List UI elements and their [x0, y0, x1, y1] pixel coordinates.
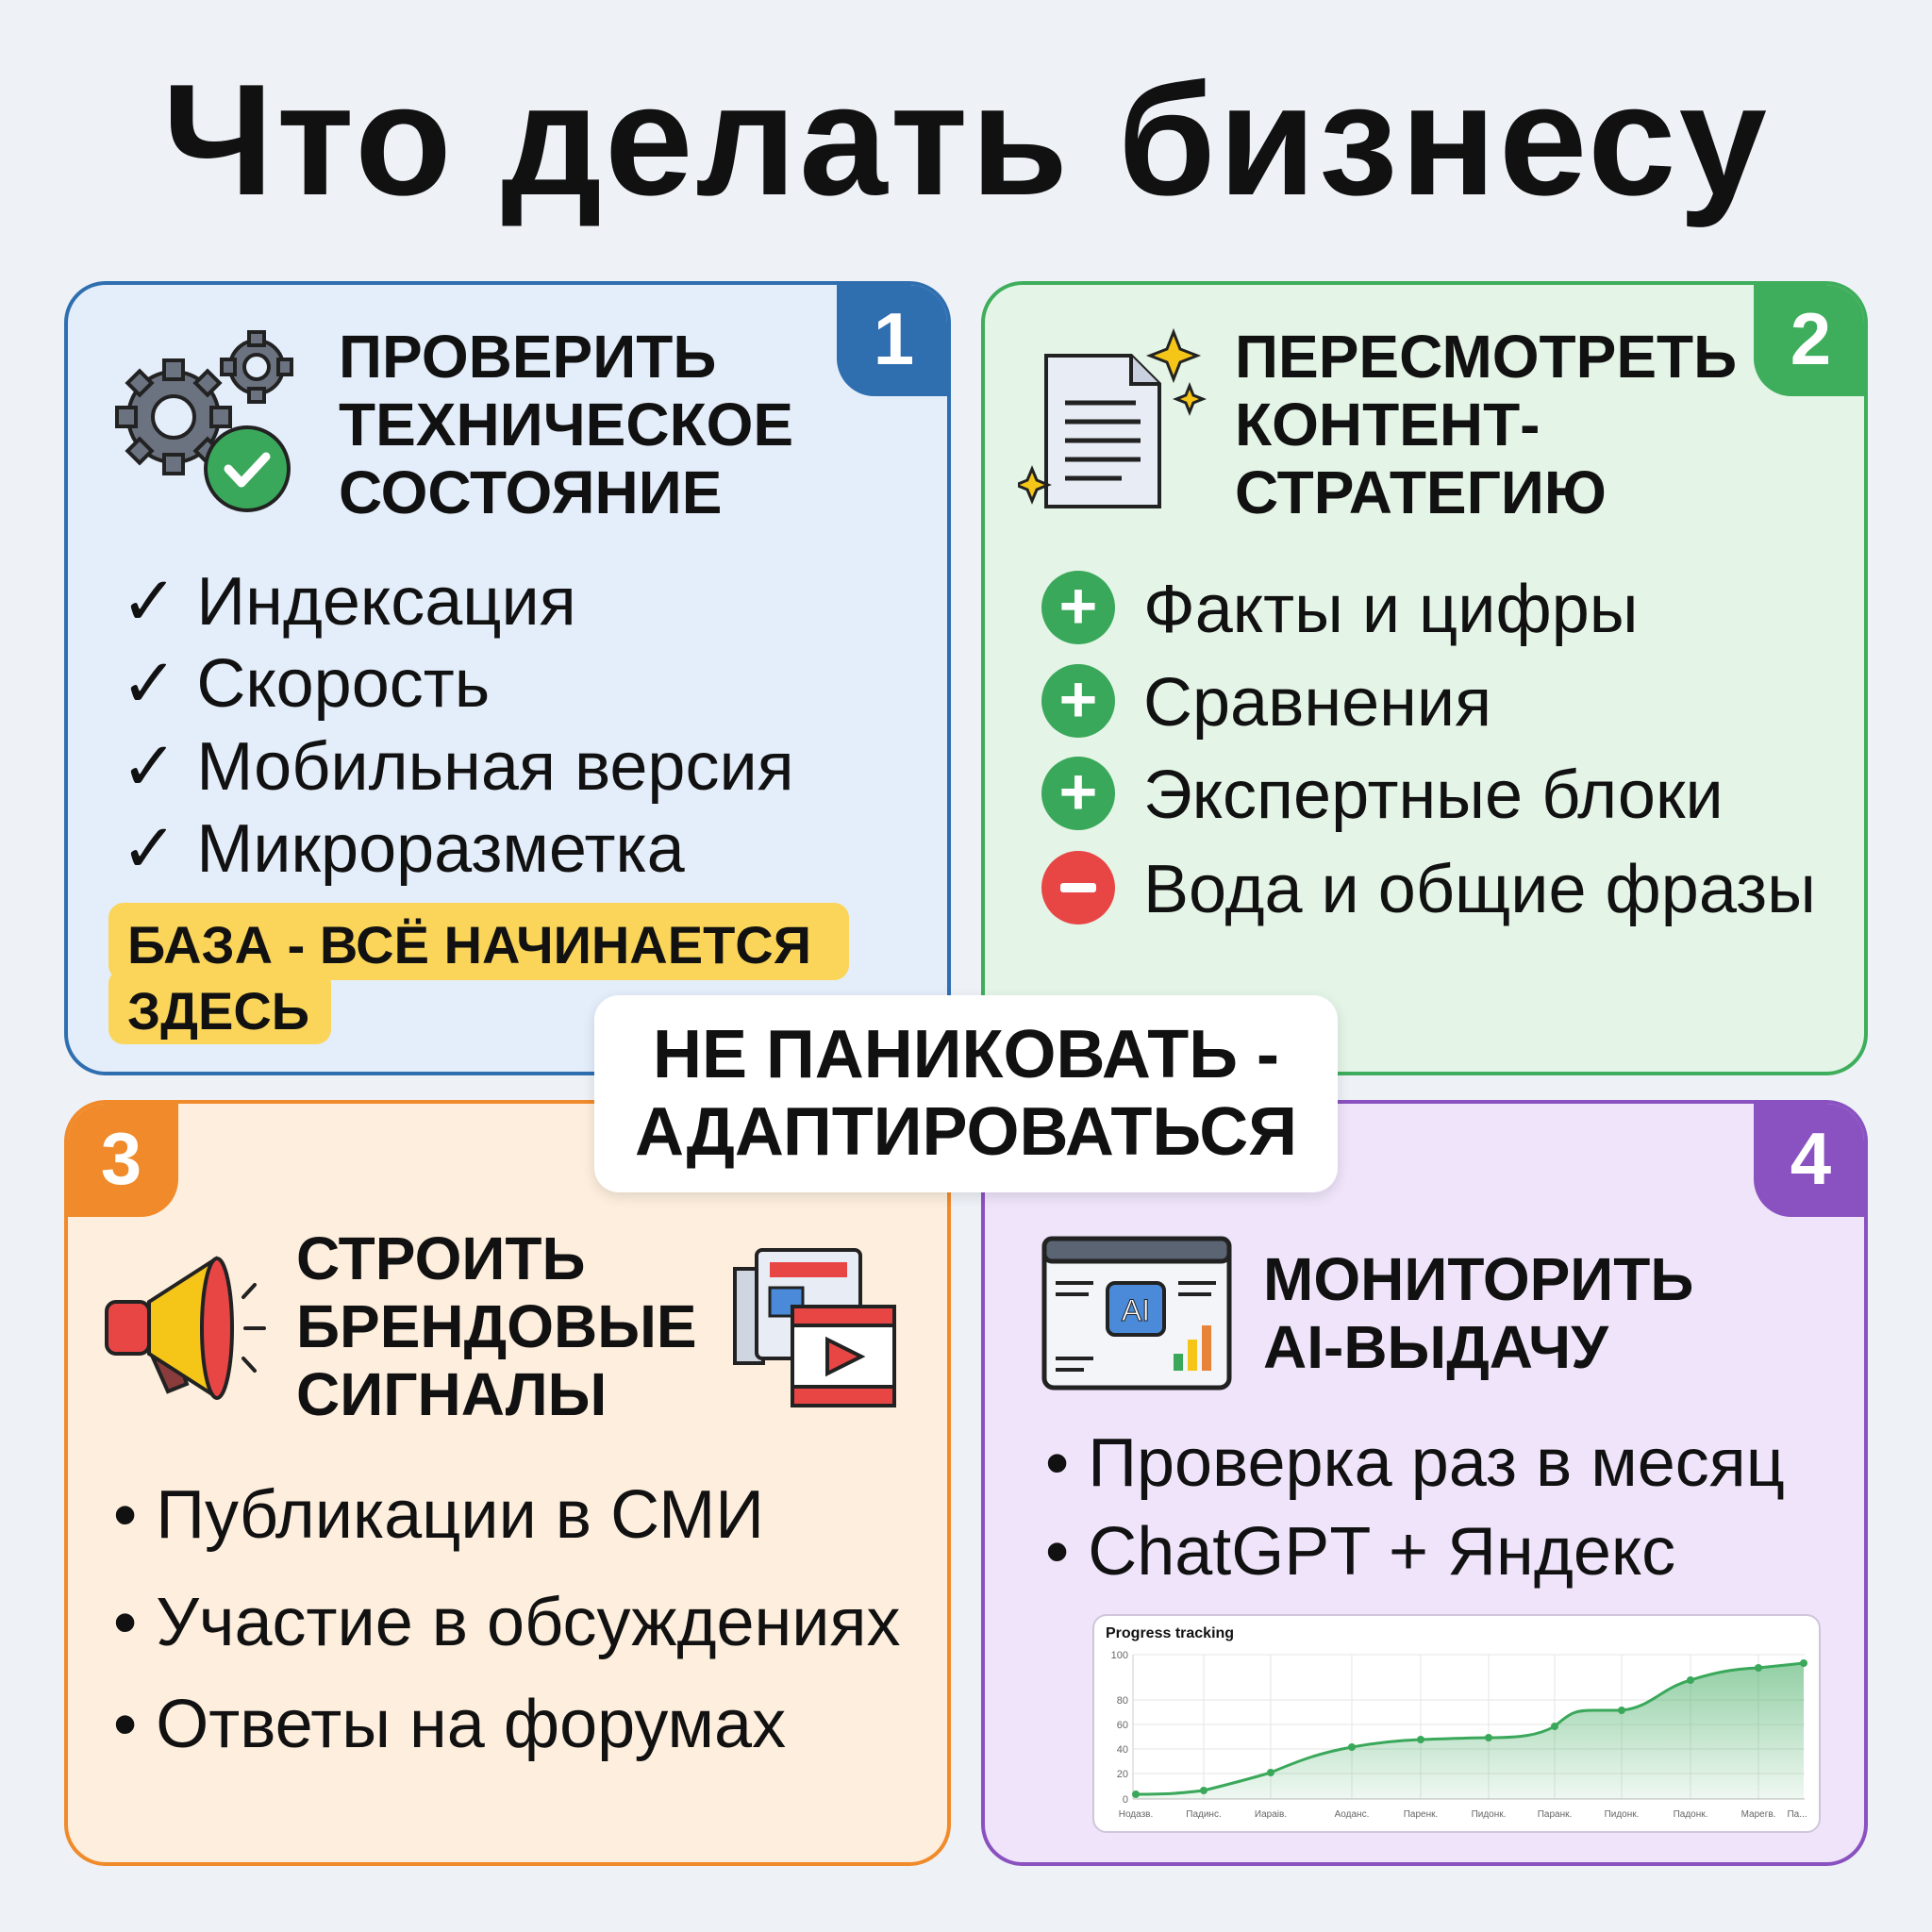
checklist 1: ✓ Индексация	[121, 564, 576, 640]
checklist 1	[121, 564, 794, 887]
icon: media news/video	[733, 1248, 896, 1407]
badge 3: 3	[101, 1117, 142, 1200]
badge 4	[1754, 1100, 1868, 1217]
list 2: Факты и цифры	[1143, 572, 1639, 647]
highlight: base	[108, 903, 849, 1044]
bulleted list 4: • Проверка раз в месяц	[1045, 1425, 1785, 1501]
badge 4: 4	[1790, 1117, 1831, 1200]
icon: megaphone	[105, 1256, 266, 1400]
callout: center: НЕ ПАНИКОВАТЬ -	[653, 1017, 1279, 1092]
icon: AI dashboard	[1041, 1236, 1232, 1391]
chart: progress tracking: Падонк.	[1674, 1809, 1707, 1820]
callout: center: АДАПТИРОВАТЬСЯ	[635, 1094, 1297, 1170]
heading 2	[1235, 323, 1737, 526]
chart: progress tracking: 40	[1117, 1744, 1128, 1756]
chart: progress tracking: 0	[1123, 1794, 1128, 1806]
list 2: +	[1059, 755, 1097, 828]
heading 2: ПЕРЕСМОТРЕТЬ	[1235, 323, 1737, 391]
heading 2: СТРАТЕГИЮ	[1235, 458, 1607, 526]
chart: progress tracking: 20	[1117, 1769, 1128, 1780]
chart: progress tracking: 80	[1117, 1695, 1128, 1707]
chart: progress tracking: Пидонк.	[1605, 1809, 1639, 1820]
panel 2: content	[981, 281, 1868, 1075]
bulleted list 3: • Участие в обсуждениях	[113, 1585, 900, 1660]
heading 1: ПРОВЕРИТЬ	[339, 323, 716, 391]
checklist 1: ✓ Мобильная версия	[121, 729, 794, 805]
chart: progress tracking: Марегв.	[1741, 1809, 1775, 1820]
heading 1: ТЕХНИЧЕСКОЕ	[339, 391, 793, 458]
panel 4: AI monitoring	[981, 1100, 1868, 1866]
badge 3	[64, 1100, 178, 1217]
bulleted list 3: • Ответы на форумах	[113, 1687, 786, 1762]
list 2: +	[1059, 569, 1097, 642]
heading 1	[339, 323, 793, 526]
chart: progress tracking: Па...	[1787, 1809, 1807, 1820]
checklist 1: ✓ Микроразметка	[121, 811, 685, 887]
title: Что делать бизнесу	[162, 51, 1770, 228]
checklist 1: ✓ Скорость	[121, 646, 490, 722]
chart: progress tracking: Падинс.	[1186, 1809, 1222, 1820]
badge 2	[1754, 281, 1868, 396]
chart: progress tracking: Аоданс.	[1335, 1809, 1369, 1820]
heading 1: СОСТОЯНИЕ	[339, 458, 722, 526]
heading 4: AI-ВЫДАЧУ	[1263, 1313, 1608, 1381]
chart: progress tracking: 60	[1117, 1720, 1128, 1731]
list 2: Экспертные блоки	[1143, 758, 1724, 833]
list 2	[1041, 569, 1816, 927]
badge 1	[837, 281, 951, 396]
heading 3: СТРОИТЬ	[296, 1224, 585, 1292]
highlight: base: БАЗА - ВСЁ НАЧИНАЕТСЯ	[127, 915, 811, 974]
icon: AI dashboard: AI	[1122, 1293, 1150, 1327]
chart: progress tracking: Иараів.	[1255, 1809, 1287, 1820]
panel 1: tech	[64, 281, 951, 1075]
heading 4	[1263, 1245, 1693, 1381]
callout: center	[594, 995, 1338, 1192]
list 2: +	[1059, 662, 1097, 736]
list 2: Сравнения	[1143, 665, 1491, 741]
bulleted list 3: • Публикации в СМИ	[113, 1477, 764, 1553]
heading 3	[296, 1224, 697, 1428]
heading 3: СИГНАЛЫ	[296, 1360, 607, 1428]
list 2: Вода и общие фразы	[1143, 852, 1816, 927]
highlight: base: ЗДЕСЬ	[127, 981, 309, 1041]
bulleted list 4: • ChatGPT + Яндекс	[1045, 1514, 1675, 1590]
heading 2: КОНТЕНТ-	[1235, 391, 1540, 458]
icon: gears with check	[115, 330, 293, 512]
chart: progress tracking: Progress tracking	[1106, 1625, 1234, 1641]
bulleted list 4	[1045, 1425, 1785, 1590]
heading 4: МОНИТОРИТЬ	[1263, 1245, 1693, 1313]
heading 3: БРЕНДОВЫЕ	[296, 1292, 697, 1360]
bulleted list 3	[113, 1477, 900, 1762]
icon: document with sparkles	[1018, 328, 1207, 508]
chart: progress tracking	[1092, 1614, 1821, 1833]
chart: progress tracking: Пидонк.	[1472, 1809, 1506, 1820]
badge 2: 2	[1790, 296, 1831, 379]
chart: progress tracking: Нодазв.	[1119, 1809, 1153, 1820]
chart: progress tracking: Паранк.	[1538, 1809, 1572, 1820]
chart: progress tracking: 100	[1111, 1650, 1128, 1661]
badge 1: 1	[874, 296, 914, 379]
panel 3: brand	[64, 1100, 951, 1866]
chart: progress tracking: Паренк.	[1404, 1809, 1438, 1820]
